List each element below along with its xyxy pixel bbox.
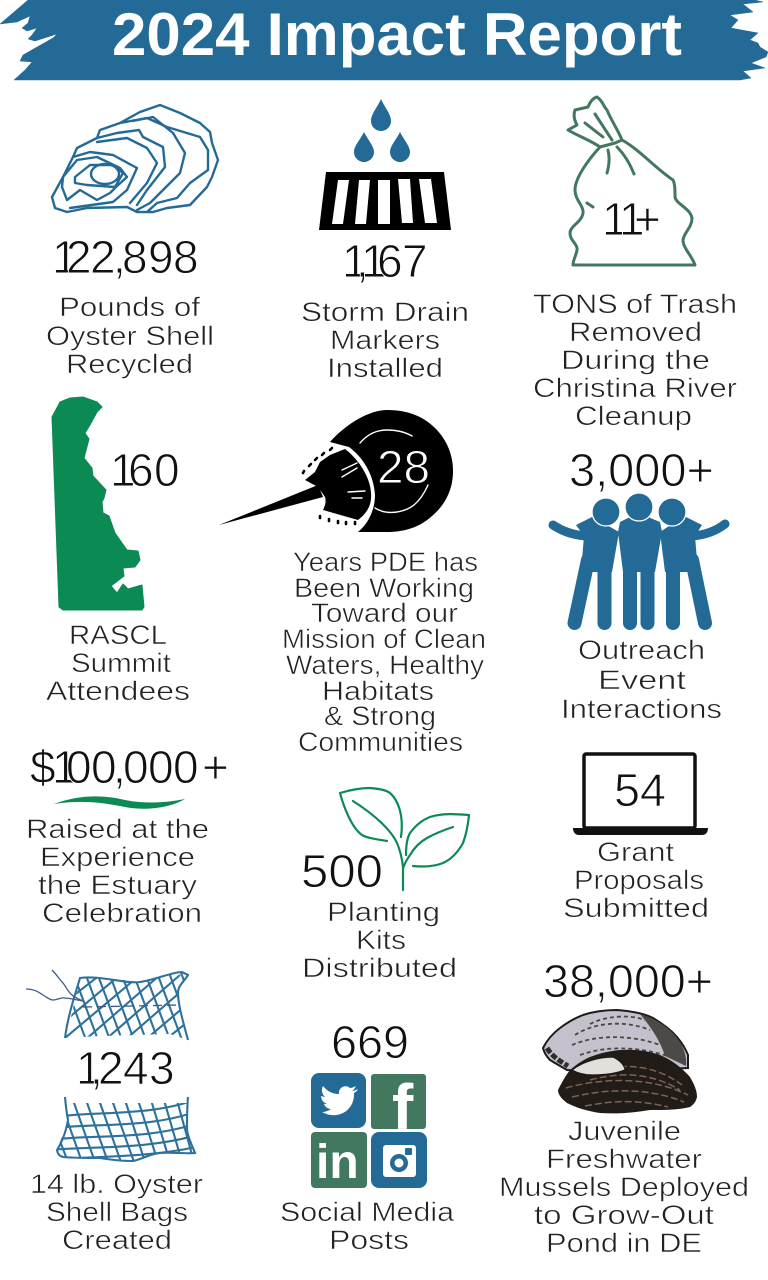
number: 160 [110, 444, 180, 496]
label: Christina River [533, 373, 737, 403]
number: 54 [614, 764, 666, 816]
label [499, 1116, 749, 1258]
icon: Instagram tile [371, 1132, 427, 1188]
label: Recycled [66, 349, 193, 379]
label [282, 547, 486, 757]
label [26, 814, 209, 928]
label: Shell Bags [46, 1197, 188, 1227]
icon: green sprout [340, 788, 469, 890]
label: Habitats [322, 676, 434, 706]
label: Toward our [311, 598, 458, 628]
icon: LinkedIn tile: in [316, 1136, 359, 1189]
label [30, 1169, 203, 1255]
number: white on shell: 28 [377, 441, 430, 493]
icon: storm drain with water drops [319, 99, 451, 230]
label: Been Working [294, 573, 474, 603]
label: Mission of Clean [282, 624, 486, 654]
label: Posts [329, 1225, 409, 1255]
stat: social media posts [280, 1016, 455, 1255]
label: Planting [327, 897, 440, 927]
stat: juvenile freshwater mussels [499, 955, 749, 1258]
stat: years PDE has been working [219, 410, 486, 757]
icon: oyster shell [52, 105, 218, 212]
number: 1,243 [76, 1042, 175, 1094]
label: RASCL [69, 620, 167, 650]
label: Raised at the [26, 814, 209, 844]
icon: freshwater mussels [543, 1010, 697, 1113]
label: Event [598, 665, 687, 695]
stat: raised at experience the estuary [26, 741, 229, 928]
number: 11+ [602, 193, 661, 245]
label: Proposals [574, 865, 704, 895]
stat: planting kits [301, 788, 469, 983]
label: Pond in DE [546, 1228, 702, 1258]
label: 14 lb. Oyster [30, 1169, 203, 1199]
stat: storm drain markers [301, 99, 469, 383]
title banner [0, 0, 768, 80]
label: Summit [71, 648, 172, 678]
label [301, 297, 469, 383]
label: Communities [298, 727, 463, 757]
icon: trash bag [568, 97, 695, 265]
icon: green swoosh [54, 796, 185, 809]
icon: Twitter tile [311, 1073, 366, 1128]
stat: oyster shell bags [26, 970, 215, 1255]
stat: RASCL summit attendees [46, 397, 190, 706]
icon: Facebook tile: f [392, 1071, 414, 1143]
label: Celebration [42, 898, 202, 928]
label: Created [62, 1225, 172, 1255]
label: Experience [40, 842, 195, 872]
label: & Strong [324, 701, 436, 731]
label: Years PDE has [293, 547, 478, 577]
label [561, 635, 722, 724]
label: Juvenile [568, 1116, 681, 1146]
label: Distributed [302, 953, 457, 983]
stat: oyster shell recycled [46, 105, 218, 379]
label [302, 897, 457, 983]
label: Removed [569, 317, 702, 347]
number: 122,898 [52, 231, 199, 283]
label: to Grow-Out [534, 1200, 715, 1230]
icon: state of Delaware [52, 397, 144, 610]
drawstring [26, 970, 180, 1007]
label: Mussels Deployed [499, 1172, 749, 1202]
icon: three people embracing [553, 493, 725, 623]
label [46, 620, 190, 706]
number: 38,000+ [543, 955, 713, 1007]
label: Kits [356, 925, 406, 955]
number: 669 [331, 1016, 409, 1068]
number: 1,167 [342, 235, 428, 287]
label: Social Media [280, 1197, 455, 1227]
label [46, 292, 214, 379]
label [533, 289, 737, 431]
icon: Facebook tile [371, 1071, 426, 1143]
label: During the [561, 345, 710, 375]
label: Oyster Shell [46, 321, 214, 351]
title text: 2024 Impact Report [112, 1, 682, 68]
icon: mesh bag top half [26, 970, 190, 1040]
stat: tons of trash [533, 97, 737, 431]
label: Grant [597, 837, 675, 867]
label: Markers [330, 325, 440, 355]
label: the Estuary [38, 870, 198, 900]
label: Freshwater [546, 1144, 702, 1174]
icon: laptop [573, 754, 708, 835]
label: Waters, Healthy [286, 650, 485, 680]
label: Interactions [561, 694, 722, 724]
label: Attendees [46, 676, 190, 706]
icon: horseshoe crab [219, 410, 453, 532]
label: Outreach [578, 635, 705, 665]
number: 500 [301, 845, 383, 897]
label [563, 837, 709, 923]
label: Cleanup [575, 401, 692, 431]
label: Installed [327, 353, 443, 383]
number: 3,000+ [569, 444, 714, 496]
label: Storm Drain [301, 297, 469, 327]
label: Submitted [563, 893, 709, 923]
number: $100,000+ [30, 741, 229, 793]
stat: outreach event interactions [553, 444, 725, 724]
stat: grant proposals [563, 754, 709, 923]
label: TONS of Trash [533, 289, 737, 319]
label: Pounds of [59, 292, 201, 322]
label [280, 1197, 455, 1255]
icon: mesh bag bottom half [50, 1097, 200, 1162]
